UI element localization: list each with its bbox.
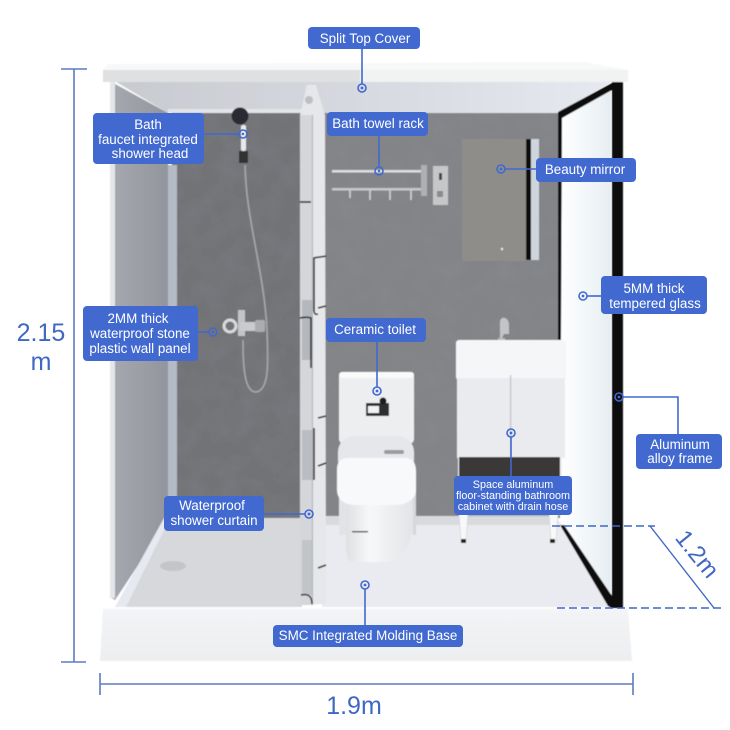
callout: tempered glass: 5MM thick xyxy=(623,281,685,296)
ceiling xyxy=(113,80,615,113)
left side wall xyxy=(110,82,168,600)
callout: shower head: faucet integrated xyxy=(98,132,198,147)
height value: 2.15 xyxy=(17,319,65,347)
callout: ceramic toilet xyxy=(326,318,426,395)
sink faucet xyxy=(498,318,509,356)
floor drain xyxy=(160,561,186,571)
shower faucet xyxy=(224,310,265,336)
height value: m xyxy=(31,348,51,376)
callout: beauty mirror xyxy=(497,158,636,182)
callout: wall panel: 2MM thick xyxy=(107,311,169,326)
integrated base xyxy=(100,609,632,661)
glass panel xyxy=(561,90,611,600)
top cover xyxy=(103,62,628,70)
back wall toilet zone xyxy=(322,113,560,518)
bathroom cabinet xyxy=(456,340,566,543)
shower floor xyxy=(118,518,302,607)
callout: aluminum frame xyxy=(615,393,722,469)
callout: aluminum frame: alloy frame xyxy=(647,451,713,466)
shower curtain xyxy=(300,85,326,605)
toilet xyxy=(337,372,416,562)
depth dimension xyxy=(552,525,724,608)
wall texture xyxy=(172,113,560,518)
wall socket xyxy=(433,166,448,205)
shower room photo xyxy=(100,62,632,661)
callout: shower head: Bath xyxy=(134,117,162,132)
shower rail xyxy=(168,109,308,113)
callout: beauty mirror: Beauty mirror xyxy=(545,162,626,177)
callout: shower curtain: Waterproof xyxy=(179,498,245,513)
callout: ceramic toilet: Ceramic toilet xyxy=(334,322,416,337)
callout: molding base xyxy=(273,581,463,647)
callout: towel rack: Bath towel rack xyxy=(332,116,424,131)
black frame top diagonal xyxy=(558,83,612,340)
callout: wall panel xyxy=(83,306,217,361)
height dimension xyxy=(17,69,87,662)
callout: shower curtain: shower curtain xyxy=(170,513,258,528)
towel rack xyxy=(332,165,427,200)
callout: split top cover: Split Top Cover xyxy=(320,31,411,46)
callout: split top cover xyxy=(308,27,420,92)
callout: tempered glass xyxy=(579,276,707,314)
callout: cabinet: floor-standing bathroom xyxy=(456,490,570,502)
depth value: 1.2m xyxy=(670,525,724,584)
callout: cabinet: cabinet with drain hose xyxy=(458,501,568,513)
back wall shower zone xyxy=(172,113,302,521)
corner trim xyxy=(168,165,177,517)
callout: cabinet: Space aluminum xyxy=(473,479,553,491)
width value: 1.9m xyxy=(326,692,382,720)
callout: wall panel: waterproof stone xyxy=(89,326,190,341)
black frame bottom diagonal xyxy=(560,525,612,608)
callout: cabinet xyxy=(454,429,572,515)
callout: shower curtain xyxy=(164,496,313,531)
shower head and hose xyxy=(232,108,268,392)
callout: tempered glass: tempered glass xyxy=(609,296,701,311)
callout: wall panel: plastic wall panel xyxy=(89,341,191,356)
callout: molding base: SMC Integrated Molding Base xyxy=(279,628,457,643)
width dimension xyxy=(100,673,633,720)
mirror xyxy=(462,139,539,261)
main floor xyxy=(322,516,612,607)
callout: towel rack xyxy=(327,112,428,175)
callout: shower head: shower head xyxy=(112,146,188,161)
callout: aluminum frame: Aluminum xyxy=(650,437,710,452)
callout: shower head xyxy=(93,113,247,164)
black frame post xyxy=(612,82,623,608)
